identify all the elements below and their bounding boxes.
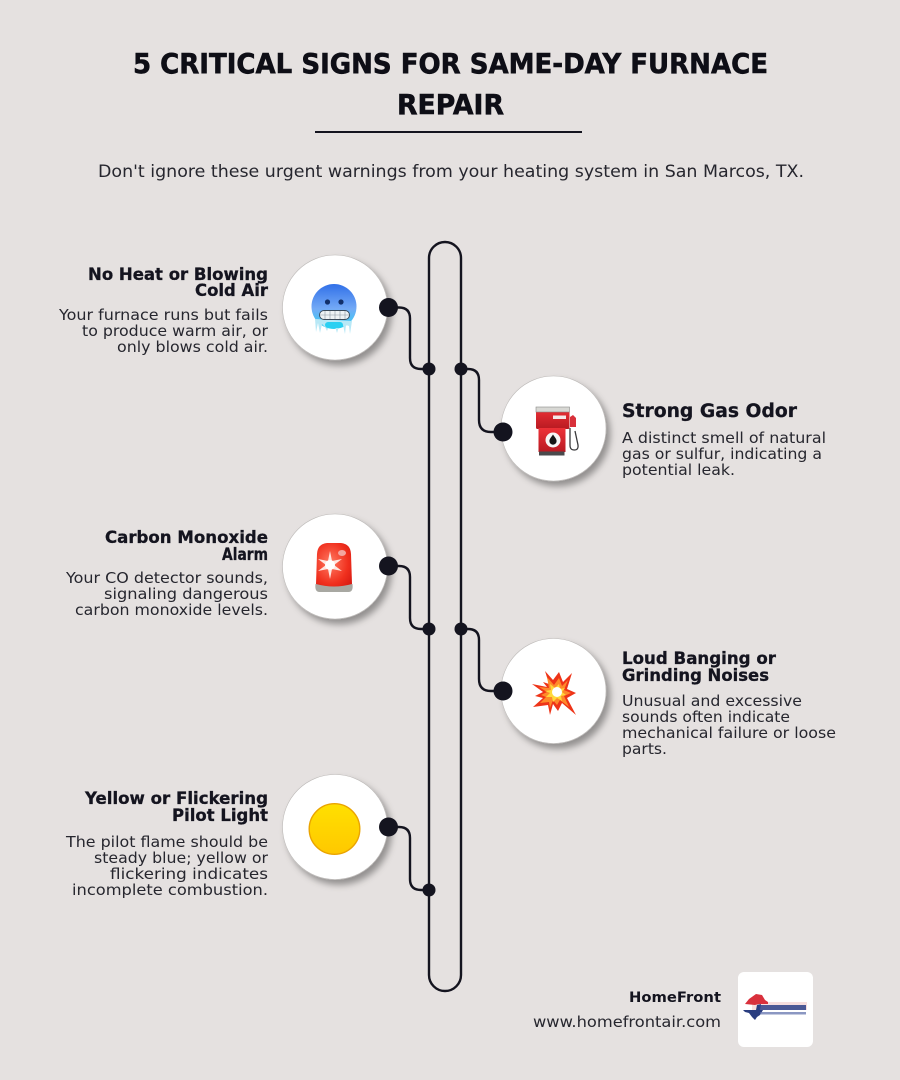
loud noises text	[622, 649, 836, 758]
panel: no heat	[58, 255, 435, 376]
loud noises text: Unusual and excessive	[622, 692, 802, 710]
pilot light text: Yellow or Flickering	[84, 789, 268, 808]
node	[494, 422, 512, 442]
rail node	[454, 362, 468, 376]
connector	[388, 566, 429, 629]
rail node	[422, 622, 436, 636]
gas odor text: Strong Gas Odor	[622, 401, 798, 422]
icon: explosion	[501, 638, 606, 744]
gas odor text: A distinct smell of natural	[622, 429, 826, 447]
panel: loud noises	[454, 622, 836, 758]
node	[379, 298, 398, 317]
node	[494, 682, 512, 700]
connector	[461, 629, 503, 691]
footer brand	[533, 990, 721, 1031]
pilot light text	[65, 789, 269, 899]
title	[133, 47, 768, 121]
no heat text: Cold Air	[195, 281, 269, 300]
loud noises text: Loud Banging or	[622, 649, 777, 668]
no heat text: to produce warm air, or	[82, 322, 269, 340]
pilot light text: steady blue; yellow or	[94, 849, 269, 867]
icon: siren	[282, 514, 388, 619]
pilot light text: flickering indicates	[110, 865, 268, 883]
loud noises text: mechanical failure or loose	[622, 724, 836, 742]
title: 5 CRITICAL SIGNS FOR SAME-DAY FURNACE	[133, 47, 768, 80]
node	[379, 818, 398, 836]
loud noises text: parts.	[622, 740, 667, 758]
timeline rail	[429, 242, 461, 991]
icon: yellow circle	[282, 774, 388, 880]
carbon monoxide text: Your CO detector sounds,	[65, 569, 268, 587]
carbon monoxide text	[65, 528, 268, 619]
rail node	[422, 362, 436, 376]
icon: fuel pump	[501, 376, 606, 481]
rail node	[422, 884, 436, 896]
title underline	[315, 131, 582, 133]
loud noises text: Grinding Noises	[622, 666, 769, 685]
loud noises text: sounds often indicate	[622, 708, 790, 726]
no heat text: only blows cold air.	[117, 338, 268, 356]
connector	[388, 827, 429, 890]
pilot light text: Pilot Light	[172, 806, 268, 825]
no heat text	[58, 265, 269, 356]
subtitle: Don't ignore these urgent warnings from your heating system in San Marcos, TX.	[98, 162, 804, 181]
connector	[388, 308, 429, 369]
title: REPAIR	[397, 88, 504, 121]
carbon monoxide text: Alarm	[222, 545, 268, 564]
carbon monoxide text: Carbon Monoxide	[105, 528, 268, 547]
footer brand: HomeFront	[629, 990, 721, 1006]
pilot light text: The pilot flame should be	[65, 833, 268, 851]
gas odor text: gas or sulfur, indicating a	[622, 445, 822, 463]
node	[379, 556, 398, 576]
footer brand: www.homefrontair.com	[533, 1013, 721, 1031]
panel: carbon monoxide	[65, 514, 436, 636]
carbon monoxide text: carbon monoxide levels.	[75, 601, 268, 619]
gas odor text	[622, 401, 826, 479]
no heat text: No Heat or Blowing	[88, 265, 268, 284]
panel: pilot light	[65, 774, 435, 899]
connector	[461, 369, 503, 432]
pilot light text: incomplete combustion.	[72, 881, 268, 899]
logo	[738, 972, 813, 1047]
carbon monoxide text: signaling dangerous	[104, 585, 268, 603]
gas odor text: potential leak.	[622, 461, 735, 479]
panel: gas odor	[454, 362, 826, 481]
icon: freezing face	[282, 255, 388, 360]
rail node	[454, 622, 468, 636]
no heat text: Your furnace runs but fails	[58, 306, 268, 324]
